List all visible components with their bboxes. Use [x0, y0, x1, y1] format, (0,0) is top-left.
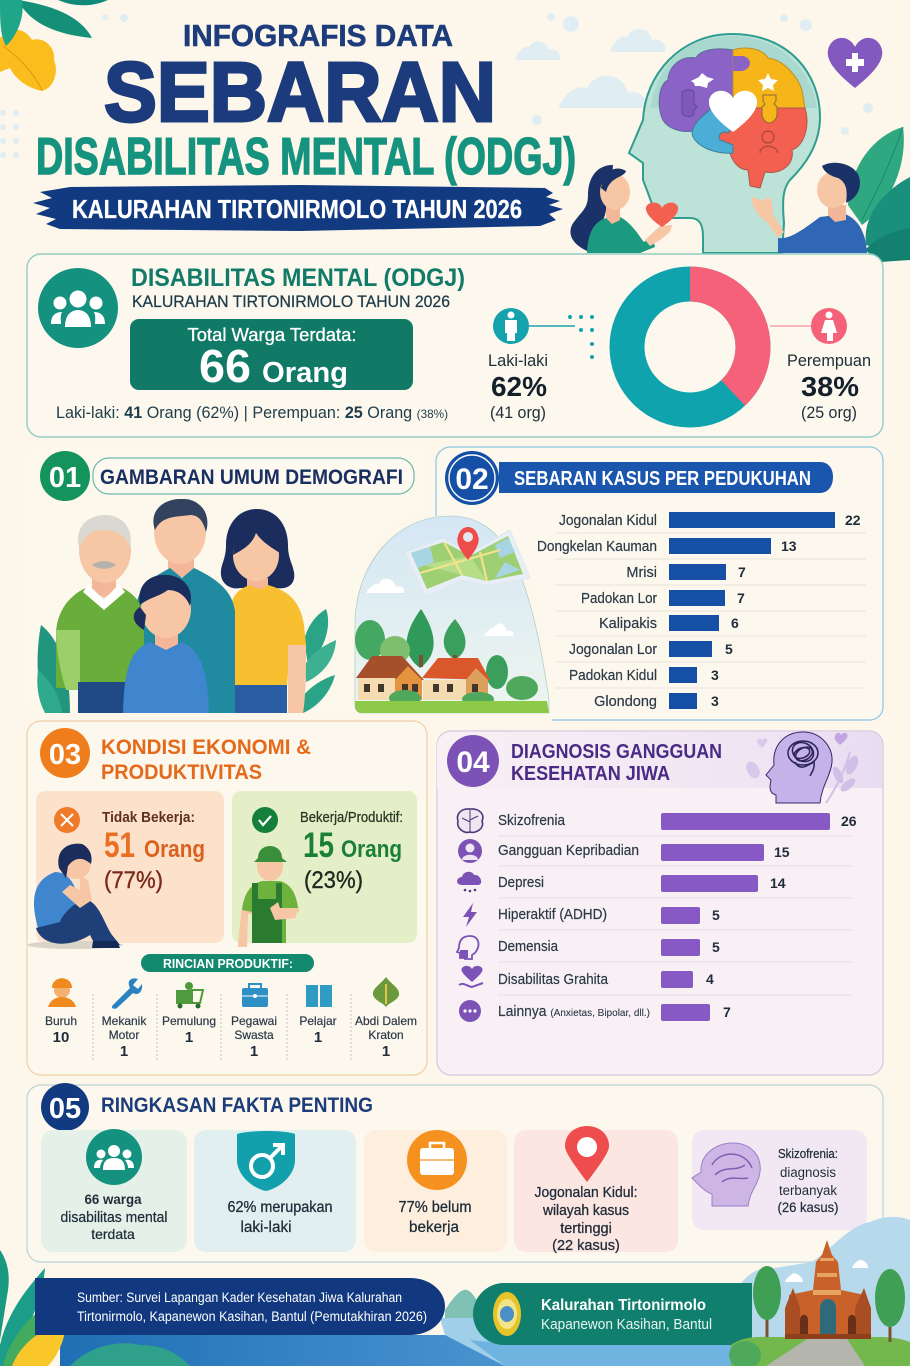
bar chart: diagnosis: Lainnya (Anxietas, Bipolar, dll.): [498, 1004, 650, 1020]
bar chart: pedukuhan: 13: [781, 538, 797, 554]
fact: laki-laki: laki-laki: [240, 1219, 292, 1236]
number 02: 02: [455, 463, 489, 496]
panel 02: pedukuhan: [355, 447, 883, 720]
card: bekerja: Orang: [341, 836, 402, 863]
bar chart: pedukuhan: Kalipakis: [599, 616, 657, 632]
number 05: 05: [49, 1093, 81, 1125]
head: [629, 34, 820, 253]
heading 04: [511, 741, 722, 785]
card: bekerja: 15: [303, 826, 334, 865]
woman: [570, 165, 678, 253]
title: SEBARAN: [104, 45, 496, 139]
fact: skizofrenia: Skizofrenia:: [778, 1147, 838, 1161]
bar chart: diagnosis: Skizofrenia: [498, 813, 566, 829]
father: [168, 555, 194, 577]
banner: [33, 185, 563, 231]
source box: Tirtonirmolo, Kapanewon Kasihan, Bantul (Pemutakhiran 2026): [77, 1309, 427, 1324]
bar chart: diagnosis: Hiperaktif (ADHD): [498, 907, 607, 923]
item: pelajar: 1: [314, 1029, 322, 1046]
illustration: head with tangled mind: [743, 732, 861, 803]
fact: jogonalan: (22 kasus): [552, 1238, 620, 1254]
number 05: [41, 1083, 89, 1131]
fact: jogonalan: [514, 1126, 678, 1254]
kalurahan badge: [473, 1283, 752, 1345]
item: pelajar: Pelajar: [299, 1014, 337, 1028]
panel 01: demografi: [27, 447, 427, 713]
panel: summary: [27, 254, 883, 437]
fact: warga: disabilitas mental: [60, 1210, 168, 1226]
sad person: [27, 941, 123, 949]
heading 02: SEBARAN KASUS PER PEDUKUHAN: [514, 468, 811, 490]
icon: purple heart with plus: [828, 38, 882, 88]
donut chart: [627, 284, 753, 410]
diagnosis icons: [457, 809, 483, 1022]
female stats: 38%: [801, 371, 859, 402]
grandfather: [92, 574, 116, 598]
heading 04: KESEHATAN JIWA: [511, 763, 670, 785]
title: INFOGRAFIS DATA: [183, 18, 453, 53]
item: pemulung: Pemulung: [162, 1014, 216, 1028]
bar chart: pedukuhan: 5: [725, 641, 733, 657]
heading 01: [93, 458, 414, 494]
female stats: [787, 351, 871, 422]
fact: jogonalan: Jogonalan Kidul:: [534, 1185, 638, 1201]
rincian pill: [141, 954, 314, 972]
bar chart: diagnosis: Depresi: [498, 875, 544, 891]
fact: belum bekerja: [364, 1130, 507, 1252]
bar chart: diagnosis: 4: [706, 971, 714, 987]
fact: laki-laki: [194, 1130, 356, 1252]
item: buruh: Buruh: [45, 1014, 77, 1028]
panel 04: diagnosis: [437, 731, 883, 1075]
footer landscape: [60, 1217, 910, 1366]
bar chart: pedukuhan: Mrisi: [626, 565, 657, 581]
item: mekanik motor: Mekanik: [102, 1014, 147, 1028]
item: pegawai swasta: [231, 984, 277, 1060]
item: abdi dalem: 1: [382, 1043, 390, 1060]
kalurahan badge: Kapanewon Kasihan, Bantul: [541, 1317, 712, 1333]
fact: skizofrenia: (26 kasus): [778, 1200, 838, 1215]
fact: skizofrenia: terbanyak: [779, 1183, 837, 1198]
heading 03: PRODUKTIVITAS: [101, 761, 262, 784]
man: [752, 163, 867, 253]
bar chart: pedukuhan: 6: [731, 615, 739, 631]
male stats: (41 org): [490, 403, 546, 422]
bar chart: pedukuhan: 7: [738, 564, 746, 580]
bar chart: pedukuhan: Padokan Kidul: [569, 668, 657, 684]
number 04: 04: [456, 746, 490, 779]
trees: [766, 1290, 768, 1337]
fact: belum bekerja: bekerja: [409, 1219, 459, 1236]
panel 03: ekonomi: [27, 721, 427, 1075]
bar chart: diagnosis: Gangguan Kepribadian: [498, 843, 639, 859]
total box: Orang: [262, 357, 348, 389]
male stats: 62%: [491, 371, 547, 402]
breakdown text: Laki-laki: 41 Orang (62%) | Perempuan: 25 Orang (38%): [56, 404, 448, 422]
heading 05: RINGKASAN FAKTA PENTING: [101, 1094, 373, 1117]
item: buruh: [45, 978, 77, 1046]
bar chart: pedukuhan: Padokan Lor: [581, 591, 657, 607]
source box: Sumber: Survei Lapangan Kader Kesehatan Jiwa Kalurahan: [77, 1290, 402, 1305]
heading 03: KONDISI EKONOMI &: [101, 736, 311, 759]
card: tidak bekerja: Tidak Bekerja:: [102, 809, 195, 826]
bar chart: pedukuhan: 3: [711, 667, 719, 683]
item: abdi dalem: [355, 977, 417, 1060]
banner: KALURAHAN TIRTONIRMOLO TAHUN 2026: [72, 194, 522, 224]
item: mekanik motor: Motor: [109, 1028, 139, 1042]
background clouds and dots: [0, 13, 873, 158]
bar chart: pedukuhan: Dongkelan Kauman: [537, 539, 657, 555]
bar chart: pedukuhan: 3: [711, 693, 719, 709]
path: [766, 1339, 865, 1366]
sky behind temple: [731, 1217, 910, 1366]
item: abdi dalem: Abdi Dalem: [355, 1014, 417, 1028]
fact: skizofrenia: [692, 1130, 867, 1230]
total box: 66: [199, 340, 251, 392]
fact: jogonalan: wilayah kasus: [542, 1203, 629, 1219]
bar chart: diagnosis: Disabilitas Grahita: [498, 972, 609, 988]
total box: Total Warga Terdata:: [188, 325, 356, 345]
white heart: [709, 91, 757, 132]
item: abdi dalem: Kraton: [368, 1028, 404, 1042]
bar chart: diagnosis: 5: [712, 907, 720, 923]
item: mekanik motor: [102, 978, 147, 1060]
bar chart: diagnosis: [498, 813, 857, 1021]
bar chart: pedukuhan: 22: [845, 512, 861, 528]
number 03: [40, 728, 90, 778]
number 04: [447, 735, 499, 787]
item: pegawai swasta: Swasta: [234, 1028, 274, 1042]
bar chart: diagnosis: 15: [774, 844, 790, 860]
bar chart: diagnosis: 5: [712, 939, 720, 955]
item: mekanik motor: 1: [120, 1043, 128, 1060]
worker: [238, 881, 299, 947]
card: bekerja: (23%): [304, 867, 363, 894]
illustration: head with puzzle brain: [570, 34, 910, 262]
mother: [221, 509, 294, 588]
bar chart: pedukuhan: Jogonalan Lor: [569, 642, 657, 658]
female stats: Perempuan: [787, 351, 871, 370]
fact: laki-laki: 62% merupakan: [228, 1199, 332, 1216]
bar chart: diagnosis: Demensia: [498, 939, 559, 955]
total box: [130, 319, 413, 392]
decorative leaves top-left: [0, 0, 108, 91]
leaves bottom-left: [0, 1250, 190, 1366]
item: pelajar: [299, 985, 337, 1046]
leaves right: [848, 127, 904, 225]
bar chart: diagnosis: 7: [723, 1004, 731, 1020]
card: tidak bekerja: (77%): [104, 867, 163, 894]
item: pemulung: [162, 982, 216, 1046]
illustration: family: [37, 499, 336, 713]
fact: warga: 66 warga: [84, 1191, 142, 1207]
illustration: map and village: [355, 516, 549, 713]
icon: male: [493, 308, 594, 359]
bar chart: diagnosis: 14: [770, 875, 786, 891]
item: pemulung: 1: [185, 1029, 193, 1046]
fact: belum bekerja: 77% belum: [398, 1199, 472, 1216]
heading 02: [499, 462, 833, 493]
heading 03: [101, 736, 311, 784]
item: buruh: 10: [53, 1029, 69, 1046]
bar chart: diagnosis: 26: [841, 813, 857, 829]
card: tidak bekerja: [27, 791, 224, 949]
item: pegawai swasta: Pegawai: [231, 1014, 277, 1028]
temple: [789, 1240, 866, 1337]
number 01: 01: [49, 462, 81, 494]
plants: [38, 625, 70, 713]
fact: skizofrenia: diagnosis: [780, 1165, 836, 1180]
panel 05: ringkasan: [27, 1083, 883, 1262]
bar chart: pedukuhan: 7: [737, 590, 745, 606]
card: tidak bekerja: 51: [104, 826, 135, 865]
fact: jogonalan: tertinggi: [560, 1221, 612, 1237]
heading 04: DIAGNOSIS GANGGUAN: [511, 741, 722, 763]
card: bekerja: [232, 791, 417, 947]
kalurahan badge: Kalurahan Tirtonirmolo: [541, 1297, 706, 1314]
icon: emblem: [493, 1292, 521, 1336]
ground: [731, 1337, 910, 1366]
heading: DISABILITAS MENTAL (ODGJ): [131, 264, 465, 292]
illustration: temple and trees: [729, 1240, 910, 1366]
bar chart: pedukuhan: Glondong: [594, 694, 657, 710]
rincian pill: RINCIAN PRODUKTIF:: [163, 956, 293, 971]
source box: [35, 1278, 445, 1335]
male stats: Laki-laki: [488, 351, 548, 370]
item: pegawai swasta: 1: [250, 1043, 258, 1060]
card: bekerja: Bekerja/Produktif:: [300, 809, 403, 826]
heading 01: GAMBARAN UMUM DEMOGRAFI: [100, 466, 403, 489]
fact: warga: terdata: [91, 1226, 135, 1242]
number 03: 03: [49, 739, 81, 771]
fact: warga: [41, 1129, 187, 1252]
female stats: (25 org): [801, 403, 857, 422]
bar chart: pedukuhan: Jogonalan Kidul: [559, 513, 657, 529]
icon: female: [770, 308, 847, 344]
title: DISABILITAS MENTAL (ODGJ): [36, 128, 576, 186]
male stats: [488, 351, 548, 422]
number 01: [40, 451, 90, 501]
icon: people group: [38, 268, 118, 348]
child: [155, 630, 178, 652]
bar chart: pedukuhan: [537, 512, 866, 710]
card: tidak bekerja: Orang: [144, 836, 205, 863]
number 02: [445, 451, 499, 505]
title: [33, 18, 576, 231]
brain: [659, 49, 733, 131]
subheading: KALURAHAN TIRTONIRMOLO TAHUN 2026: [132, 292, 450, 311]
